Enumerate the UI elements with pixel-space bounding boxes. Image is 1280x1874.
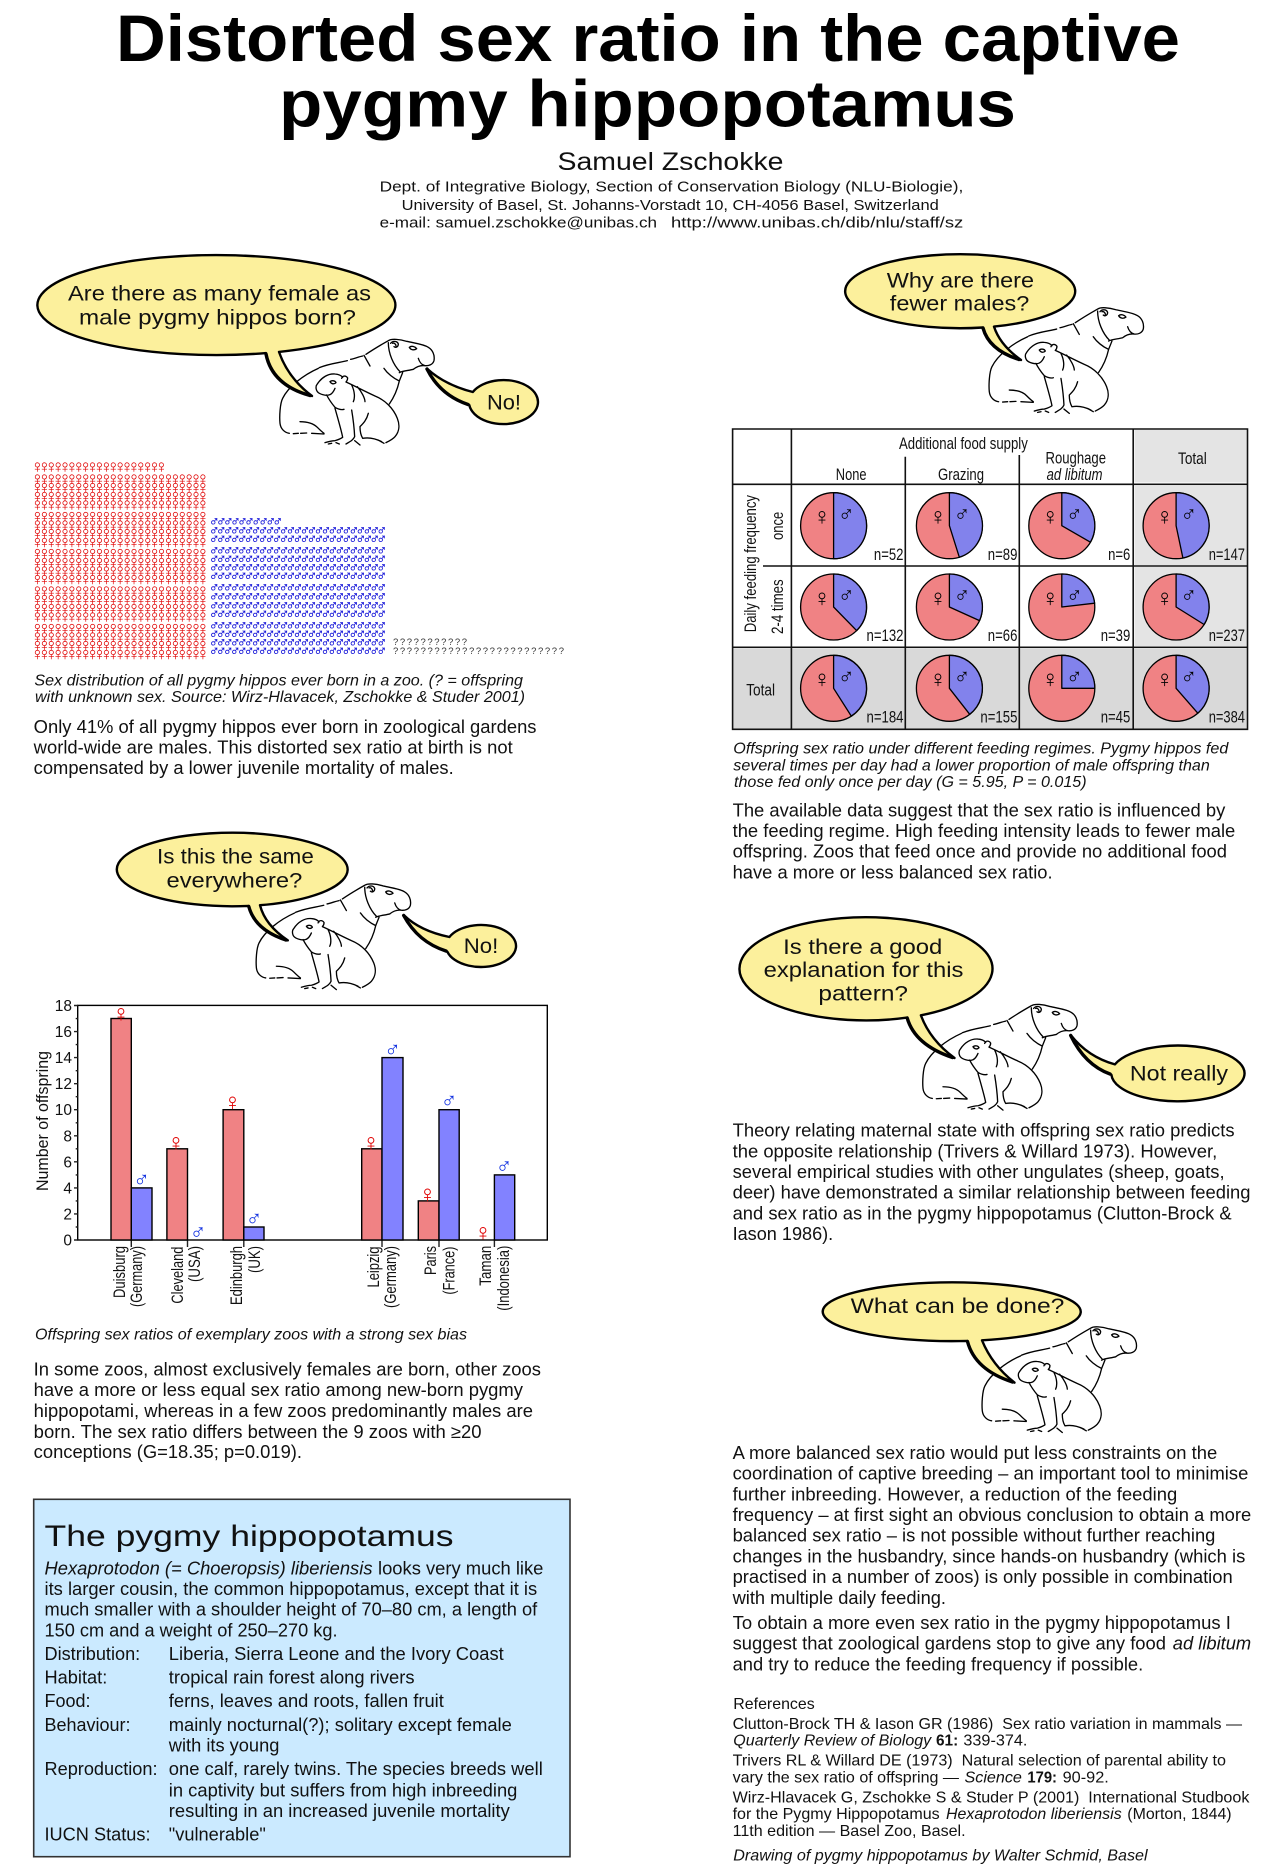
text block: theory: several empirical studies with other ungulates (sheep, goats,	[733, 1162, 1225, 1182]
caption: sex distribution	[34, 673, 525, 706]
text block: theory: Theory relating maternal state with offspring sex ratio predicts	[733, 1121, 1235, 1141]
table header text: Total	[1178, 450, 1207, 468]
text block: theory: deer) have demonstrated a similar relationship between feeding	[733, 1183, 1250, 1203]
text block: differences between zoos: born. The sex ratio differs between the 9 zoos with ≥20	[34, 1422, 482, 1442]
speech bubble: are there as many	[37, 255, 395, 396]
males pictogram: ♂♂♂♂♂♂♂♂♂♂♂♂♂♂♂♂♂♂♂♂♂♂♂♂♂	[209, 634, 387, 650]
table header text: Roughage	[1046, 449, 1106, 467]
zoo labels: (Germany)	[128, 1246, 146, 1307]
table row headers: 2-4 times	[769, 579, 787, 634]
pie: 2-4 times, grazing: ♂	[954, 583, 970, 608]
y axis labels: 0	[63, 1232, 72, 1250]
females pictogram: ♀♀♀♀♀♀♀♀♀♀♀♀♀♀♀♀♀♀♀♀♀♀♀♀♀	[31, 589, 210, 609]
pie: total, roughage: ♂	[1066, 664, 1083, 689]
females pictogram: ♀♀♀♀♀♀♀♀♀♀♀♀♀♀♀♀♀♀♀♀♀♀♀♀♀	[31, 635, 210, 655]
panel facts list: IUCN Status:	[44, 1824, 150, 1844]
panel facts list: tropical rain forest along rivers	[169, 1668, 414, 1688]
panel facts list: resulting in an increased juvenile mortality	[169, 1801, 510, 1821]
references: 179:	[1027, 1770, 1057, 1786]
females pictogram: ♀♀♀♀♀♀♀♀♀♀♀♀♀♀♀♀♀♀♀♀♀♀♀♀♀	[31, 598, 210, 618]
bar chart: offspring by zoo	[34, 998, 547, 1311]
author and affiliation	[380, 148, 963, 231]
y axis title: Number of offspring	[34, 1051, 52, 1191]
table header text: None	[836, 466, 866, 484]
pie: once, none: n=52	[874, 546, 904, 564]
pie: 2-4 times, grazing: ♀	[929, 585, 947, 612]
table header text: Additional food supply	[899, 435, 1028, 453]
panel facts list: mainly nocturnal(?); solitary except female	[169, 1715, 512, 1735]
females pictogram: ♀♀♀♀♀♀♀♀♀♀♀♀♀♀♀♀♀♀♀♀♀♀♀♀♀	[31, 618, 210, 638]
panel facts list: Habitat:	[44, 1668, 107, 1688]
caption: exemplary zoos: Offspring sex ratios of exemplary zoos with a strong sex bias	[35, 1326, 467, 1343]
pie: total, roughage: ♀	[1041, 666, 1059, 693]
males pictogram: ♂♂♂♂♂♂♂♂♂♂♂♂♂♂♂♂♂♂♂♂♂♂♂♂♂	[209, 606, 387, 622]
panel intro text: 150 cm and a weight of 250–270 kg.	[44, 1620, 337, 1640]
title	[116, 1, 1180, 141]
author and affiliation: University of Basel, St. Johanns-Vorstadt 10, CH-4056 Basel, Switzerland	[402, 197, 939, 214]
author and affiliation: http://www.unibas.ch/dib/nlu/staff/sz	[671, 214, 963, 231]
caption: feeding regimes: several times per day had a lower proportion of male offspring than	[733, 757, 1210, 774]
illustration: mother and calf hippo, section 2	[256, 884, 411, 990]
females pictogram: ♀♀♀♀♀♀♀♀♀♀♀♀♀♀♀♀♀♀♀♀♀♀♀♀♀	[31, 626, 210, 646]
females pictogram: ♀♀♀♀♀♀♀♀♀♀♀♀♀♀♀♀♀♀♀♀♀♀♀♀♀	[31, 494, 210, 514]
panel facts list: Behaviour:	[44, 1715, 130, 1735]
text block: recommendation: To obtain a more even sex ratio in the pygmy hippopotamus I	[733, 1613, 1231, 1633]
zoo labels: Cleveland	[169, 1247, 187, 1304]
pie: once, grazing: ♀	[929, 504, 947, 530]
panel intro text: much smaller with a shoulder height of 70–80 cm, a length of	[44, 1600, 538, 1620]
caption: feeding regimes	[733, 740, 1229, 791]
speech bubble: is this the same everywhere: everywhere?	[166, 868, 302, 892]
caption: feeding regimes: those fed only once per day (G = 5.95, P = 0.015)	[734, 774, 1087, 791]
y axis labels: 14	[55, 1050, 72, 1067]
y axis labels: 4	[63, 1180, 72, 1197]
text block: theory: the opposite relationship (Trivers & Willard 1973). However,	[733, 1141, 1217, 1161]
panel intro text: its larger cousin, the common hippopotamus, except that it is	[44, 1579, 537, 1599]
pie: once, none: ♀	[813, 504, 831, 530]
text block: feeding regime influence: the feeding regime. High feeding intensity leads to fewer male	[733, 821, 1235, 841]
references: (Morton, 1844)	[1127, 1806, 1232, 1823]
sex symbols above bars: ♀	[224, 1089, 242, 1116]
y axis labels: 16	[55, 1024, 72, 1041]
sex symbols above bars: ♂	[190, 1220, 206, 1244]
females pictogram: ♀♀♀♀♀♀♀♀♀♀♀♀♀♀♀♀♀♀♀♀♀♀♀♀♀	[31, 506, 210, 526]
speech bubble: good explanation	[739, 917, 992, 1058]
text block: more balanced sex ratio: frequency – at first sight an obvious conclusion to obtain a more	[733, 1505, 1251, 1525]
zoo labels: Leipzig	[365, 1246, 383, 1288]
pie: once, roughage: n=6	[1108, 546, 1130, 564]
speech bubble: why fewer males	[845, 254, 1075, 360]
pie: 2-4 times, none	[801, 574, 904, 645]
author and affiliation: Samuel Zschokke	[558, 148, 784, 176]
panel facts list	[44, 1644, 543, 1844]
pie: once, grazing: n=89	[988, 546, 1017, 564]
females pictogram: ♀♀♀♀♀♀♀♀♀♀♀♀♀♀♀♀♀♀♀♀♀♀♀♀♀	[31, 560, 210, 580]
speech bubble: No! second: No!	[464, 934, 498, 958]
panel intro text: Hexaprotodon (= Choeropsis) liberiensis	[44, 1558, 372, 1578]
sex symbols above bars: ♂	[496, 1154, 512, 1178]
pictogram chart: sex distribution of all offspring	[31, 456, 564, 664]
females pictogram: ♀♀♀♀♀♀♀♀♀♀♀♀♀♀♀♀♀♀♀	[31, 456, 168, 476]
panel facts list: Distribution:	[44, 1644, 140, 1664]
pie: once, total: ♂	[1180, 501, 1197, 526]
zoo labels	[111, 1246, 513, 1311]
males pictogram: ♂♂♂♂♂♂♂♂♂♂♂♂♂♂♂♂♂♂♂♂♂♂♂♂♂	[209, 531, 387, 547]
panel intro text: looks very much like	[378, 1558, 543, 1578]
references: 11th edition — Basel Zoo, Basel.	[733, 1823, 966, 1840]
pie: 2-4 times, total	[1143, 574, 1245, 645]
pie: once, total	[1143, 493, 1245, 564]
references: for the Pygmy Hippopotamus	[733, 1806, 940, 1823]
speech bubble: is this the same everywhere	[117, 833, 348, 940]
pie: total, total: ♂	[1180, 664, 1197, 689]
y axis labels: 18	[55, 998, 72, 1015]
speech bubble: are there as many: male pygmy hippos born?	[79, 306, 356, 330]
pie: 2-4 times, roughage: n=39	[1101, 627, 1130, 645]
illustration: mother and calf hippo, section 5	[982, 1327, 1137, 1432]
speech bubble: No!	[427, 369, 538, 424]
panel facts list: in captivity but suffers from high inbreeding	[169, 1780, 517, 1800]
males pictogram: ♂♂♂♂♂♂♂♂♂♂♂♂♂♂♂♂♂♂♂♂♂♂♂♂♂	[209, 597, 387, 613]
y axis labels: 10	[55, 1102, 72, 1119]
text block: feeding regime influence: offspring. Zoos that feed once and provide no additional food	[733, 842, 1227, 862]
males pictogram: ♂♂♂♂♂♂♂♂♂♂♂♂♂♂♂♂♂♂♂♂♂♂♂♂♂	[209, 579, 387, 595]
females pictogram: ♀♀♀♀♀♀♀♀♀♀♀♀♀♀♀♀♀♀♀♀♀♀♀♀♀	[31, 468, 210, 488]
panel facts list: Liberia, Sierra Leone and the Ivory Coast	[169, 1644, 504, 1664]
text block: more balanced sex ratio: A more balanced sex ratio would put less constraints on the	[733, 1443, 1217, 1463]
sex symbols above bars: ♀	[418, 1181, 436, 1208]
references: Science	[964, 1770, 1022, 1786]
drawing credit: Drawing of pygmy hippopotamus by Walter Schmid, Basel	[733, 1848, 1148, 1864]
pie: once, none: ♂	[838, 501, 854, 526]
table row headers: once	[769, 512, 787, 540]
speech bubble: good explanation: Is there a good	[783, 935, 942, 959]
pie: total, grazing: ♂	[954, 664, 970, 689]
text block: differences between zoos: hippopotami, whereas in a few zoos predominantly males are	[34, 1401, 533, 1421]
speech bubble: good explanation: pattern?	[818, 982, 908, 1006]
males pictogram: ♂♂♂♂♂♂♂♂♂♂♂♂♂♂♂♂♂♂♂♂♂♂♂♂♂	[209, 551, 387, 567]
illustration: mother and calf hippo, section 3	[989, 308, 1144, 413]
table header text: Grazing	[938, 466, 984, 484]
pie: total, roughage: n=45	[1101, 708, 1130, 726]
text block: recommendation	[733, 1613, 1251, 1674]
females pictogram	[31, 456, 210, 664]
caption: feeding regimes: Offspring sex ratio under different feeding regimes. Pygmy hippos fed	[733, 740, 1229, 757]
females pictogram: ♀♀♀♀♀♀♀♀♀♀♀♀♀♀♀♀♀♀♀♀♀♀♀♀♀	[31, 523, 210, 543]
references	[733, 1696, 1250, 1840]
males pictogram: ♂♂♂♂♂♂♂♂♂♂♂♂♂♂♂♂♂♂♂♂♂♂♂♂♂	[209, 542, 387, 558]
speech bubble: what can be done: What can be done?	[851, 1294, 1064, 1318]
males pictogram: ♂♂♂♂♂♂♂♂♂♂♂♂♂♂♂♂♂♂♂♂♂♂♂♂♂	[209, 588, 387, 604]
pie: once, total: ♀	[1156, 504, 1174, 530]
pie: 2-4 times, none: ♂	[838, 583, 854, 608]
unknown sex pictogram: ???????????	[393, 637, 467, 648]
pie: total, none: n=184	[866, 708, 904, 726]
references: 339-374.	[963, 1733, 1027, 1750]
pie: once, none	[801, 493, 904, 564]
illustration: mother and calf hippo, section 4	[923, 1004, 1077, 1110]
panel intro text	[44, 1558, 543, 1640]
text block: theory	[733, 1121, 1250, 1244]
pie: 2-4 times, roughage: ♂	[1066, 583, 1083, 608]
zoo labels: (USA)	[186, 1246, 204, 1282]
speech bubble: what can be done	[823, 1282, 1081, 1383]
pie: 2-4 times, total: ♀	[1156, 585, 1174, 612]
females pictogram: ♀♀♀♀♀♀♀♀♀♀♀♀♀♀♀♀♀♀♀♀♀♀♀♀♀	[31, 569, 210, 589]
pie: once, grazing	[916, 493, 1017, 564]
text block: only 41% males: Only 41% of all pygmy hippos ever born in zoological gardens	[34, 717, 536, 737]
author and affiliation: Dept. of Integrative Biology, Section of Conservation Biology (NLU-Biologie),	[380, 179, 963, 196]
speech bubble: why fewer males: fewer males?	[890, 292, 1029, 316]
y axis labels: 8	[63, 1128, 72, 1145]
females pictogram: ♀♀♀♀♀♀♀♀♀♀♀♀♀♀♀♀♀♀♀♀♀♀♀♀♀	[31, 543, 210, 563]
panel background	[34, 1499, 570, 1857]
panel facts list: "vulnerable"	[169, 1824, 266, 1844]
references: vary the sex ratio of offspring —	[733, 1770, 959, 1786]
sex symbols above bars: ♂	[384, 1037, 401, 1062]
text block: recommendation: suggest that zoological gardens stop to give any food	[733, 1634, 1166, 1654]
text block: only 41% males	[33, 717, 536, 778]
table row headers: Daily feeding frequency	[742, 494, 760, 632]
text block: feeding regime influence: have a more or less balanced sex ratio.	[733, 862, 1053, 882]
pie: 2-4 times, none: n=132	[866, 627, 904, 645]
males pictogram: ♂♂♂♂♂♂♂♂♂♂	[209, 513, 283, 529]
table row headers	[742, 494, 787, 700]
table row headers: Total	[746, 682, 775, 700]
pie: once, grazing: ♂	[954, 501, 970, 526]
panel heading: The pygmy hippopotamus	[44, 1520, 454, 1553]
text block: more balanced sex ratio	[732, 1443, 1251, 1608]
pie: 2-4 times, grazing	[916, 574, 1017, 645]
pie: once, roughage	[1029, 493, 1130, 564]
pie: once, roughage: ♀	[1041, 504, 1059, 530]
text block: differences between zoos	[34, 1360, 541, 1462]
pie: 2-4 times, total: ♂	[1180, 583, 1197, 608]
unknown sex pictogram	[393, 637, 564, 657]
males pictogram	[209, 513, 387, 659]
speech bubble: not really	[1071, 1035, 1245, 1101]
sex symbols above bars	[112, 1000, 512, 1246]
text block: more balanced sex ratio: coordination of captive breeding – an important tool to minimise	[733, 1464, 1248, 1484]
sex symbols above bars: ♂	[246, 1206, 262, 1231]
table header text: ad libitum	[1047, 466, 1102, 484]
pie: 2-4 times, grazing: n=66	[988, 627, 1017, 645]
text block: theory: and sex ratio as in the pygmy hippopotamus (Clutton-Brock &	[733, 1203, 1232, 1223]
text block: more balanced sex ratio: with multiple daily feeding.	[732, 1588, 946, 1608]
sex symbols above bars: ♂	[133, 1167, 150, 1192]
y axis ticks	[74, 1006, 494, 1247]
zoo labels: Duisburg	[111, 1246, 129, 1298]
zoo labels: Edinburgh	[228, 1246, 246, 1305]
table header text	[836, 435, 1207, 484]
pie: 2-4 times, total: n=237	[1209, 627, 1245, 645]
pie: total, roughage	[1029, 655, 1130, 726]
zoo labels: (Germany)	[382, 1246, 400, 1308]
title: pygmy hippopotamus	[279, 67, 1016, 141]
females pictogram: ♀♀♀♀♀♀♀♀♀♀♀♀♀♀♀♀♀♀♀♀♀♀♀♀♀	[31, 514, 210, 534]
pie: total, none	[801, 655, 904, 726]
references: References	[733, 1696, 815, 1713]
pie: 2-4 times, roughage	[1029, 574, 1130, 645]
females pictogram: ♀♀♀♀♀♀♀♀♀♀♀♀♀♀♀♀♀♀♀♀♀♀♀♀♀	[31, 606, 210, 626]
speech bubble: No!: No!	[487, 391, 521, 415]
text block: more balanced sex ratio: changes in the husbandry, since hands-on husbandry (which is	[733, 1546, 1245, 1566]
references: Trivers RL & Willard DE (1973) Natural selection of parental ability to	[733, 1753, 1226, 1770]
females pictogram: ♀♀♀♀♀♀♀♀♀♀♀♀♀♀♀♀♀♀♀♀♀♀♀♀♀	[31, 477, 210, 497]
pie: total, grazing	[916, 655, 1017, 726]
zoo labels: Paris	[422, 1246, 440, 1275]
speech bubble: is this the same everywhere: Is this the same	[157, 845, 314, 869]
males pictogram: ♂♂♂♂♂♂♂♂♂♂♂♂♂♂♂♂♂♂♂♂♂♂♂♂♂	[209, 522, 387, 538]
panel facts list: Reproduction:	[44, 1759, 158, 1779]
females pictogram: ♀♀♀♀♀♀♀♀♀♀♀♀♀♀♀♀♀♀♀♀♀♀♀♀♀	[31, 532, 210, 552]
pie: total, grazing: n=155	[980, 708, 1017, 726]
pie: once, roughage: ♂	[1066, 501, 1083, 526]
zoo labels: Taman	[477, 1246, 495, 1286]
pie: total, grazing: ♀	[929, 666, 947, 693]
bars	[111, 1018, 515, 1240]
y axis labels: 2	[63, 1206, 72, 1223]
panel facts list: one calf, rarely twins. The species breeds well	[169, 1759, 543, 1779]
references: Hexaprotodon liberiensis	[946, 1806, 1122, 1823]
shaded total cells	[734, 430, 1246, 728]
illustration: mother and calf hippo, section 1	[280, 339, 434, 445]
pie: total, none: ♀	[813, 666, 831, 693]
table grid	[733, 429, 1248, 729]
pie: total, none: ♂	[838, 664, 854, 689]
y axis labels: 12	[55, 1076, 72, 1093]
chart frame	[78, 1005, 547, 1240]
y axis labels	[55, 998, 72, 1250]
females pictogram: ♀♀♀♀♀♀♀♀♀♀♀♀♀♀♀♀♀♀♀♀♀♀♀♀♀	[31, 552, 210, 572]
males pictogram: ♂♂♂♂♂♂♂♂♂♂♂♂♂♂♂♂♂♂♂♂♂♂♂♂♂	[209, 568, 387, 584]
author and affiliation: e-mail: samuel.zschokke@unibas.ch	[380, 214, 657, 231]
table: pie charts of sex ratio by feeding regime	[733, 429, 1248, 729]
references: Clutton-Brock TH & Iason GR (1986) Sex ratio variation in mammals —	[733, 1716, 1242, 1733]
pie: 2-4 times, roughage: ♀	[1041, 585, 1059, 612]
panel facts list: with its young	[168, 1736, 279, 1756]
zoo labels: (France)	[441, 1247, 459, 1295]
text block: feeding regime influence	[733, 800, 1235, 882]
caption: sex distribution: with unknown sex. Source: Wirz-Hlavacek, Zschokke & Studer 2001)	[35, 689, 525, 706]
panel: the pygmy hippopotamus fact box	[34, 1499, 570, 1857]
title: Distorted sex ratio in the captive	[116, 1, 1180, 75]
zoo labels: (UK)	[246, 1246, 264, 1273]
sex symbols above bars: ♂	[441, 1088, 457, 1113]
text block: more balanced sex ratio: practised in a number of zoos) is only possible in combination	[733, 1567, 1233, 1587]
pie: total, total	[1143, 655, 1245, 726]
references: 90-92.	[1063, 1770, 1109, 1786]
unknown sex pictogram: ?????????????????????????	[393, 646, 564, 657]
pie: 2-4 times, none: ♀	[813, 585, 831, 612]
speech bubble: not really: Not really	[1130, 1062, 1228, 1086]
pie: total, total: ♀	[1156, 666, 1174, 693]
males pictogram: ♂♂♂♂♂♂♂♂♂♂♂♂♂♂♂♂♂♂♂♂♂♂♂♂♂	[209, 617, 387, 633]
pie: once, total: n=147	[1209, 546, 1245, 564]
pie: total, total: n=384	[1209, 708, 1245, 726]
text block: feeding regime influence: The available data suggest that the sex ratio is influenced by	[733, 800, 1225, 820]
text block: recommendation: and try to reduce the feeding frequency if possible.	[733, 1654, 1143, 1674]
males pictogram: ♂♂♂♂♂♂♂♂♂♂♂♂♂♂♂♂♂♂♂♂♂♂♂♂♂	[209, 643, 387, 659]
sex symbols above bars: ♀	[362, 1130, 380, 1156]
text block: more balanced sex ratio: balanced sex ratio – is not possible without further reaching	[733, 1526, 1215, 1546]
panel facts list: ferns, leaves and roots, fallen fruit	[169, 1691, 444, 1711]
text block: only 41% males: compensated by a lower juvenile mortality of males.	[34, 758, 454, 778]
females pictogram: ♀♀♀♀♀♀♀♀♀♀♀♀♀♀♀♀♀♀♀♀♀♀♀♀♀	[31, 580, 210, 600]
males pictogram: ♂♂♂♂♂♂♂♂♂♂♂♂♂♂♂♂♂♂♂♂♂♂♂♂♂	[209, 559, 387, 575]
text block: differences between zoos: have a more or less equal sex ratio among new-born pygmy	[34, 1380, 523, 1400]
sex symbols above bars: ♀	[474, 1220, 492, 1246]
references: Quarterly Review of Biology	[733, 1733, 932, 1750]
references: Wirz-Hlavacek G, Zschokke S & Studer P (2001) International Studbook	[733, 1790, 1250, 1806]
text block: differences between zoos: In some zoos, almost exclusively females are born, other zoos	[34, 1360, 541, 1380]
sex symbols above bars: ♀	[112, 1000, 130, 1028]
text block: only 41% males: world-wide are males. This distorted sex ratio at birth is not	[33, 738, 513, 758]
speech bubble: No! second	[404, 915, 516, 967]
females pictogram: ♀♀♀♀♀♀♀♀♀♀♀♀♀♀♀♀♀♀♀♀♀♀♀♀♀	[31, 644, 210, 664]
references: 61:	[936, 1733, 958, 1750]
panel facts list: Food:	[44, 1691, 90, 1711]
speech bubble: are there as many: Are there as many female as	[68, 282, 371, 306]
speech bubble: good explanation: explanation for this	[764, 958, 963, 982]
speech bubble: why fewer males: Why are there	[887, 269, 1034, 293]
females pictogram: ♀♀♀♀♀♀♀♀♀♀♀♀♀♀♀♀♀♀♀♀♀♀♀♀♀	[31, 486, 210, 506]
text block: theory: Iason 1986).	[733, 1224, 833, 1244]
caption: sex distribution: Sex distribution of all pygmy hippos ever born in a zoo. (? = offspring	[34, 673, 523, 690]
text block: more balanced sex ratio: further inbreeding. However, a reduction of the feeding	[733, 1484, 1177, 1504]
zoo labels: (Indonesia)	[495, 1246, 513, 1311]
text block: differences between zoos: conceptions (G=18.35; p=0.019).	[34, 1442, 302, 1462]
sex symbols above bars: ♀	[167, 1130, 185, 1156]
text block: recommendation: ad libitum	[1173, 1634, 1251, 1654]
y axis labels: 6	[63, 1154, 72, 1171]
males pictogram: ♂♂♂♂♂♂♂♂♂♂♂♂♂♂♂♂♂♂♂♂♂♂♂♂♂	[209, 626, 387, 642]
